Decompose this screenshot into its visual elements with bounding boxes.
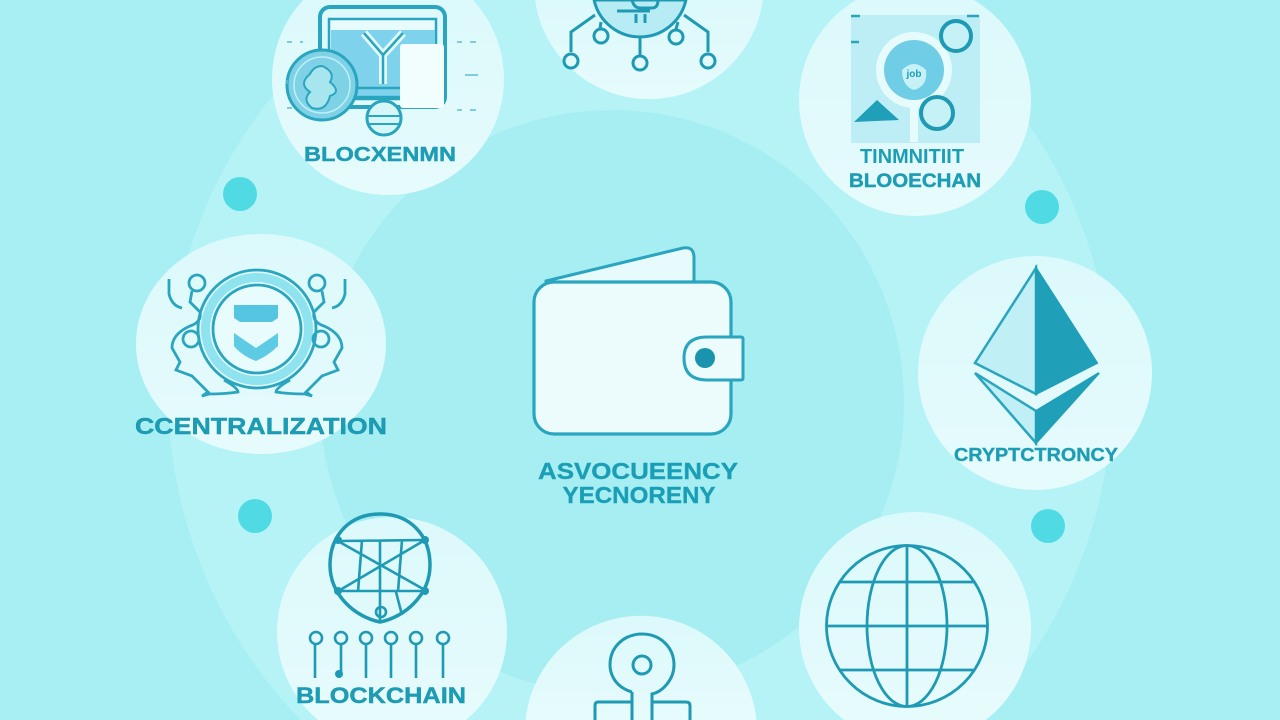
connector dots bbox=[223, 177, 1065, 543]
node: bottom centre key bbox=[526, 616, 756, 720]
node: right cryptocurrency: CRYPTCTRONCY bbox=[954, 445, 1118, 465]
node: top-right blockchain: BLOOECHAN bbox=[849, 171, 981, 192]
node: left centralization: CCENTRALIZATION bbox=[135, 413, 387, 439]
node: top-left blockchain: BLOCXENMN bbox=[304, 144, 456, 166]
node: bottom-left blockchain bbox=[277, 514, 507, 720]
node: right cryptocurrency bbox=[918, 256, 1152, 490]
central wallet icon bbox=[534, 248, 743, 434]
node: top-left blockchain bbox=[272, 0, 504, 195]
orbit ring bbox=[168, 0, 1112, 720]
central label: ASVOCUEENCY bbox=[538, 458, 738, 484]
node: bottom-left blockchain: BLOCKCHAIN bbox=[296, 683, 466, 708]
node: top-right blockchain: job bbox=[906, 69, 922, 80]
node: bottom-right globe bbox=[799, 512, 1031, 720]
node: top centre network bbox=[535, 0, 763, 99]
central label bbox=[538, 458, 738, 508]
central label: YECNORENY bbox=[562, 482, 716, 508]
node: top-right blockchain: TINMNITIIT bbox=[860, 146, 964, 168]
node: left centralization bbox=[135, 234, 387, 454]
node: top-right blockchain bbox=[799, 0, 1031, 216]
